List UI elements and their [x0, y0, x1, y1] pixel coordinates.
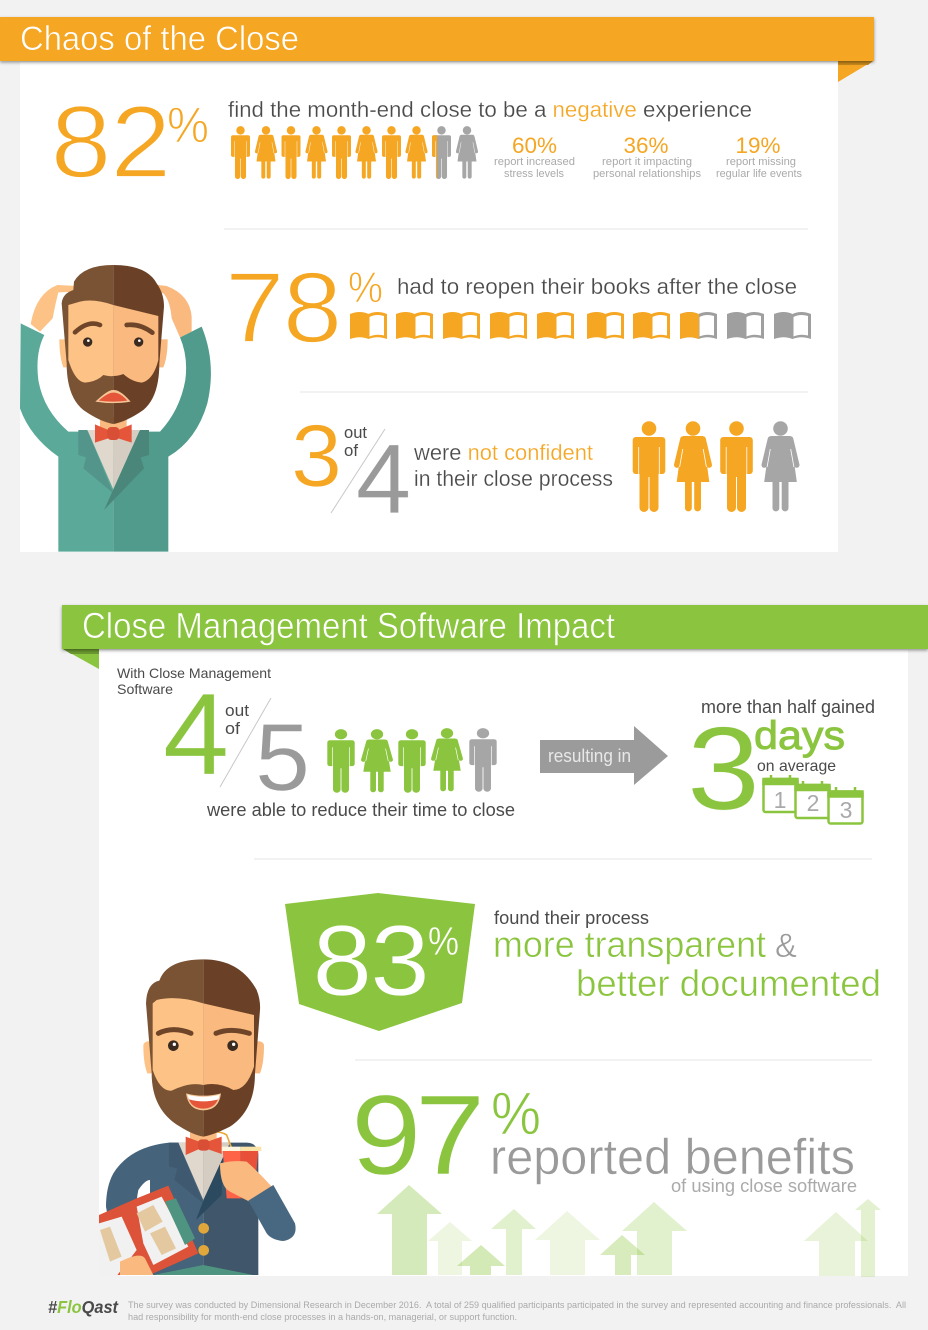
stat: 3 days: more than half gained	[701, 696, 875, 717]
text: reduce time to close: were able to reduce their time to close	[206, 799, 515, 820]
arrow: resulting in	[540, 726, 668, 785]
stat: 19 percent: 19%	[736, 133, 780, 158]
stat: 19 percent	[716, 133, 802, 180]
calendar 3: 3	[840, 797, 852, 823]
stat: 3 out of 4: out	[344, 423, 367, 442]
footnote: The survey was conducted by Dimensional Research in December 2016. A total of 259 qualified participants participated in the survey and represented accounting and finance professionals. All	[128, 1300, 906, 1310]
raised hands	[31, 284, 192, 337]
stat: 3 out of 4: 3	[291, 406, 342, 505]
stat: 36 percent	[593, 133, 701, 180]
text: more transparent and better documented: found their process	[494, 908, 649, 928]
stat: 82 percent: 82	[51, 85, 171, 199]
stat: 4 out of 5: 5	[255, 704, 310, 811]
clipboards	[99, 1186, 198, 1276]
arrow: resulting in: resulting in	[548, 746, 631, 766]
text: more transparent and better documented: more transparent	[493, 924, 767, 965]
text: with close management software: With Close Management	[117, 665, 271, 681]
icons: four people	[633, 421, 797, 512]
stat: 60 percent	[494, 133, 575, 180]
stat: 60 percent: report increased	[494, 156, 575, 168]
illustration: happy man	[99, 959, 296, 1276]
bottom strip	[153, 1265, 253, 1275]
icons: five people	[327, 728, 497, 793]
arm with drink	[213, 1132, 296, 1241]
stat: 82 percent: %	[167, 97, 209, 153]
text: not confident	[413, 440, 613, 491]
stat: 3 days: on average	[757, 758, 836, 775]
stat: 3 out of 4	[291, 406, 411, 534]
arms and jacket	[20, 323, 211, 552]
stat: 19 percent: report missing	[726, 156, 796, 168]
stat: 60 percent: 60%	[512, 133, 557, 158]
calendar 1: 1	[774, 787, 786, 813]
badge: 83 percent	[285, 893, 475, 1031]
hair and beard	[146, 959, 260, 1137]
stat: 3 out of 4: of	[344, 441, 358, 460]
footnote: had responsibility for month-end close processes in a hands-on, managerial, or support function.	[128, 1312, 517, 1322]
text: more transparent and better documented	[493, 908, 881, 1004]
face	[153, 998, 254, 1110]
text: reported benefits: of using close software	[671, 1176, 857, 1196]
stat: 4 out of 5: 4	[163, 669, 229, 799]
badge: 83 percent: 83	[312, 904, 430, 1016]
ribbon fold	[63, 649, 99, 669]
buttons	[198, 1223, 209, 1256]
text: reported benefits: reported benefits	[490, 1129, 855, 1185]
logo: FloQast: #FloQast	[48, 1297, 119, 1317]
stat: 36 percent: personal relationships	[593, 168, 701, 180]
stat: 36 percent: report it impacting	[602, 156, 692, 168]
stat: 4 out of 5	[163, 669, 310, 811]
neck and bow tie	[186, 1130, 222, 1155]
shirt and lapels	[78, 430, 149, 510]
calendar 2: 2	[807, 790, 819, 816]
text: with close management software: Software	[117, 681, 173, 697]
stat: 19 percent: regular life events	[716, 168, 802, 180]
badge: 83 percent: %	[428, 920, 459, 964]
icons: people row, 82 percent	[231, 126, 476, 179]
stat: 78 percent: 78	[225, 251, 342, 363]
text: not confident: in their close process	[414, 466, 613, 491]
shirt and lapels	[169, 1143, 230, 1220]
text: more transparent and better documented: &	[775, 927, 797, 965]
icons: books row	[350, 312, 811, 339]
title banner	[0, 17, 874, 61]
stat: 60 percent: stress levels	[504, 168, 564, 180]
title banner	[62, 605, 928, 649]
footnote	[128, 1300, 906, 1322]
ribbon fold	[838, 61, 873, 82]
text: with close management software	[117, 665, 271, 697]
stat: 78 percent: %	[348, 263, 383, 312]
stat: 4 out of 5: of	[225, 719, 240, 738]
ears	[59, 339, 168, 367]
illustration: stressed man	[20, 265, 211, 552]
stat: 3 days	[687, 696, 875, 835]
stat: 3 days: 3	[687, 703, 760, 835]
title banner: Chaos of the Close	[20, 20, 299, 58]
lower hand	[120, 1256, 153, 1275]
jacket	[106, 1143, 258, 1275]
arrows: rising background	[377, 1185, 881, 1277]
title banner: Close Management Software Impact	[82, 605, 615, 646]
stat: 3 out of 4: 4	[356, 424, 411, 534]
panel: chaos of the close	[0, 17, 874, 552]
text: not confident: were not confident	[413, 440, 594, 465]
stat: 3 days: days	[754, 714, 845, 758]
neck and bow tie	[95, 417, 132, 443]
hair and beard	[62, 265, 164, 424]
panel: close management software impact	[62, 605, 928, 1277]
stat: 36 percent: 36%	[624, 133, 668, 158]
stat: 97 percent: 97	[351, 1072, 485, 1198]
text: reopen books: had to reopen their books after the close	[397, 274, 797, 299]
stat: 4 out of 5: out	[225, 701, 249, 720]
stat: 97 percent: %	[491, 1080, 541, 1147]
ears	[143, 1041, 264, 1073]
text: negative experience: find the month-end close to be a negative experience	[228, 97, 752, 122]
icons: calendars	[764, 775, 862, 824]
text: more transparent and better documented: better documented	[576, 963, 881, 1004]
face	[68, 301, 158, 403]
